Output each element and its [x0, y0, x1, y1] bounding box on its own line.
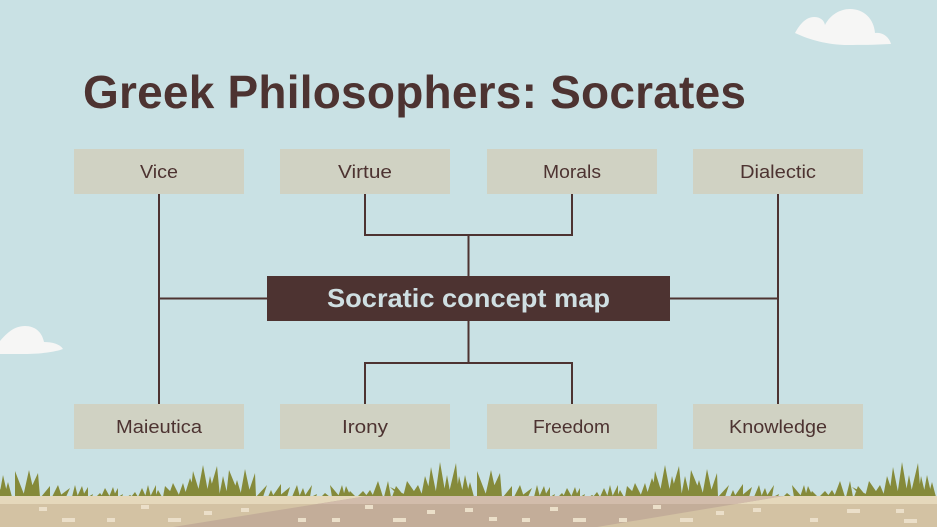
- central box: Socratic concept map: Socratic concept map: [327, 283, 610, 313]
- box: Morals: Morals: [543, 162, 601, 182]
- box: Dialectic: Dialectic: [740, 162, 816, 182]
- box: Virtue: Virtue: [338, 162, 392, 182]
- road: [0, 496, 937, 527]
- box: Vice: [74, 149, 244, 194]
- box: Maieutica: [74, 404, 244, 449]
- box: Irony: Irony: [342, 417, 388, 437]
- title: Greek Philosophers: Socrates: [83, 66, 746, 118]
- icon: cloud left: [0, 326, 63, 354]
- box: Vice: Vice: [140, 162, 178, 182]
- box: Dialectic: [693, 149, 863, 194]
- box: Maieutica: Maieutica: [116, 417, 203, 437]
- grass strip: [0, 462, 937, 497]
- central box: Socratic concept map: [267, 276, 670, 321]
- connector lines: [159, 194, 778, 404]
- box: Knowledge: [693, 404, 863, 449]
- icon: cloud top right: [795, 9, 891, 45]
- box: Freedom: Freedom: [533, 417, 610, 437]
- box: Morals: [487, 149, 657, 194]
- box: Freedom: [487, 404, 657, 449]
- box: Virtue: [280, 149, 450, 194]
- box: Irony: [280, 404, 450, 449]
- box: Knowledge: Knowledge: [729, 417, 827, 437]
